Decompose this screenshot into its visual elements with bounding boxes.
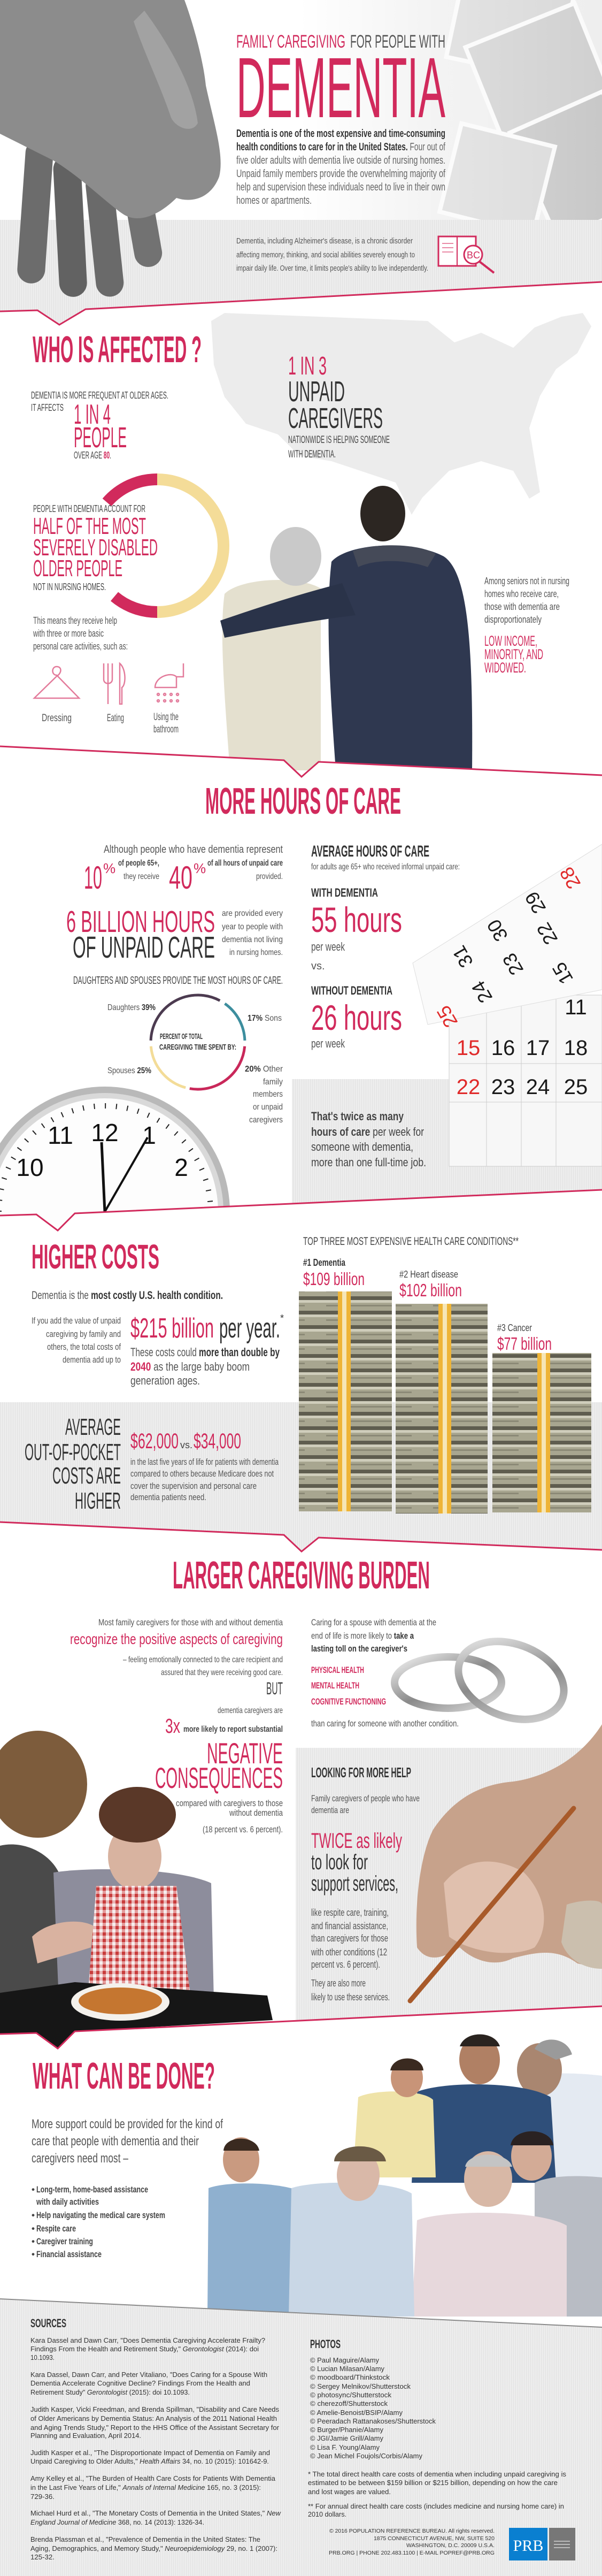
donut chart: caregiving time by relationship xyxy=(107,995,283,1125)
footer: copyright and address: © 2016 POPULATION REFERENCE BUREAU. All rights reserved. xyxy=(329,2528,495,2534)
donut chart: caregiving time by relationship: CAREGIVING TIME SPENT BY: xyxy=(159,1043,236,1052)
stat: 10% of people receive 40% of hours: they receive xyxy=(124,872,159,881)
sources list: Findings From the Health and Retirement Study," Gerontologist (2014): doi xyxy=(30,2345,259,2353)
stat: average out-of-pocket costs xyxy=(25,1414,279,1514)
sources list: Amy Kelley et al., "The Burden of Health Care Costs for Patients With Dementia xyxy=(30,2475,275,2482)
panel: striped box behind twice-as-many text xyxy=(292,1079,602,1218)
photo credits list: © Sergey Melnikov/Shutterstock xyxy=(310,2383,411,2390)
photo credits list: © cherezoff/Shutterstock xyxy=(310,2400,388,2407)
icon: shower (using the bathroom) xyxy=(153,663,183,735)
footer: copyright and address xyxy=(329,2528,495,2556)
text: BUT xyxy=(266,1679,283,1698)
photo: wall clock: 10 xyxy=(16,1153,44,1181)
list: support needed: Respite care xyxy=(36,2223,76,2234)
photo credits list: © JGI/Jamie Grill/Alamy xyxy=(310,2435,384,2442)
icon: book with magnifier xyxy=(438,236,494,273)
text: most costly condition, $215 billion: per year. xyxy=(219,1313,280,1344)
text: looking for more help: to look for xyxy=(311,1851,368,1874)
sources list: SOURCES xyxy=(30,2317,66,2330)
stat: 10% of people receive 40% of hours: % xyxy=(103,860,115,876)
stat: average out-of-pocket costs: OUT-OF-POCKET xyxy=(25,1439,121,1465)
photo: calendar: 22 xyxy=(457,1075,480,1099)
sources list: Michael Hurd et al., "The Monetary Costs of Dementia in the United States," New xyxy=(30,2510,281,2517)
sources list: Judith Kasper, Vicki Freedman, and Brenda Spillman, "Disability and Care Needs xyxy=(30,2406,279,2413)
logo: PRB xyxy=(509,2528,575,2560)
footnotes: and lost wages are valued. xyxy=(308,2488,391,2496)
stat: 6 billion hours of unpaid care xyxy=(66,905,283,987)
photo: feeding an elderly woman xyxy=(0,1731,273,2048)
stat: 10% of people receive 40% of hours: 10 xyxy=(84,860,102,896)
stat: 10% of people receive 40% of hours: Although people who have dementia represent xyxy=(104,844,283,855)
title: FAMILY CAREGIVING xyxy=(236,32,345,52)
list: support needed: • xyxy=(32,2249,35,2259)
text: disproportionately low income xyxy=(484,576,569,676)
text: looking for more help: Family caregivers of people who have xyxy=(311,1793,420,1803)
text: HIGHER COSTS xyxy=(32,1237,159,1276)
text: disproportionately low income: LOW INCOME, xyxy=(484,633,537,649)
photo credits list: © Lucian Milasan/Alamy xyxy=(310,2365,385,2373)
photo: calendar: 18 xyxy=(564,1036,588,1060)
stat: 6 billion hours of unpaid care: year to people with xyxy=(222,922,283,931)
photo: wall clock: 11 xyxy=(48,1121,73,1149)
definition text: impair daily life. Over time, it limits people's ability to live independently. xyxy=(236,264,428,273)
photo: calendar: 15 xyxy=(547,959,577,988)
text: personal care activities: personal care activities, such as: xyxy=(33,641,128,652)
sources list: Kara Dassel, Dawn Carr, and Peter Vitaliano, "Does Caring for a Spouse With xyxy=(30,2371,267,2379)
text: spouse caregiving toll: MENTAL HEALTH xyxy=(311,1680,359,1691)
text: looking for more help: likely to use these services. xyxy=(311,1992,390,2002)
stat: 1 in 4 people over 80 xyxy=(31,390,168,461)
stat: 10% of people receive 40% of hours: 40 xyxy=(169,860,192,896)
stat: average hours of care: vs. xyxy=(311,960,325,972)
photo: calendar: 23 xyxy=(491,1075,515,1099)
stat: average out-of-pocket costs: vs. xyxy=(180,1440,192,1450)
photo credits list: © Jean Michel Foujols/Corbis/Alamy xyxy=(310,2452,423,2460)
donut: half of most severely disabled: PEOPLE WITH DEMENTIA ACCOUNT FOR xyxy=(33,503,145,514)
text: spouse caregiving toll: Caring for a spouse with dementia at the xyxy=(311,1617,436,1627)
photo: calendar: 15 xyxy=(457,1036,480,1060)
chart: top three most expensive conditions (money stacks): $109 billion xyxy=(303,1269,365,1289)
text: positive aspects vs negative consequences: CONSEQUENCES xyxy=(155,1761,283,1794)
list: support needed: Financial assistance xyxy=(36,2249,102,2259)
photo collage: old photographs xyxy=(299,0,602,240)
photo: wall clock: 1 xyxy=(142,1121,156,1149)
stat: 6 billion hours of unpaid care: DAUGHTERS AND SPOUSES PROVIDE THE MOST HOURS OF CARE. xyxy=(73,975,283,987)
stat: 1 in 3 unpaid caregivers: UNPAID xyxy=(288,376,345,408)
stat: average out-of-pocket costs: in the last five years of life for patients with dementia xyxy=(130,1457,279,1467)
text: most costly condition, $215 billion: generation ages. xyxy=(130,1374,200,1387)
text: WHO IS AFFECTED ? xyxy=(33,328,202,370)
stat: average out-of-pocket costs: AVERAGE xyxy=(65,1414,121,1440)
footer: copyright and address: WASHINGTON, D.C. 20009 U.S.A. xyxy=(406,2542,495,2549)
title xyxy=(236,32,445,135)
list: support needed: • xyxy=(32,2236,35,2246)
text: looking for more help: percent vs. 6 percent). xyxy=(311,1959,380,1970)
photo: extended family xyxy=(207,2034,602,2317)
list: support needed: with daily activities xyxy=(36,2197,99,2207)
sources list: 10.1093. xyxy=(30,2354,55,2361)
stat: 6 billion hours of unpaid care: in nursing homes. xyxy=(229,948,283,957)
list: support needed: Help navigating the medical care system xyxy=(36,2210,165,2220)
photo: calendar: 17 xyxy=(526,1036,550,1060)
text: positive aspects vs negative consequences xyxy=(70,1617,283,1834)
chart: top three most expensive conditions (money stacks): #2 Heart disease xyxy=(399,1269,458,1280)
text: positive aspects vs negative consequences: 3x xyxy=(165,1715,180,1738)
sources list: Dementia Accelerate Cognitive Decline? Findings From the Health and xyxy=(30,2380,250,2387)
stat: 10% of people receive 40% of hours: of all hours of unpaid care xyxy=(207,859,283,868)
text: positive aspects vs negative consequences: without dementia xyxy=(229,1808,283,1818)
sources list: Judith Kasper et al., "The Disproportionate Impact of Dementia on Family and xyxy=(30,2449,270,2457)
stat: 1 in 3 unpaid caregivers: NATIONWIDE IS HELPING SOMEONE xyxy=(288,434,390,446)
stat: average out-of-pocket costs: HIGHER xyxy=(75,1488,121,1514)
photo credits list: © moodboard/Thinkstock xyxy=(310,2374,390,2381)
footer: copyright and address: PRB.ORG | PHONE 202.483.1100 | E-MAIL POPREF@PRB.ORG xyxy=(329,2550,495,2556)
text: positive aspects vs negative consequences: compared with caregivers to those xyxy=(176,1798,283,1808)
chart: top three most expensive conditions (money stacks) xyxy=(299,1235,591,1514)
text: WHAT CAN BE DONE? xyxy=(33,2055,215,2097)
photo: wall clock: 2 xyxy=(174,1153,188,1181)
text: most costly condition, $215 billion: $215 billion xyxy=(130,1313,214,1344)
text: spouse caregiving toll: COGNITIVE FUNCTIONING xyxy=(311,1696,386,1707)
photo credits list: © photosync/Shutterstock xyxy=(310,2391,392,2399)
donut chart: caregiving time by relationship: caregivers xyxy=(249,1115,283,1125)
sources list: 125-32. xyxy=(30,2554,55,2561)
photo: calendar: 25 xyxy=(432,1002,462,1031)
sources list: Aging, Demographics, and Memory Study," Neuroepidemiology 29, no. 1 (2007): xyxy=(30,2545,277,2552)
stat: 10% of people receive 40% of hours xyxy=(84,844,283,896)
photo credits list: © Amelie-Benoist/BSIP/Alamy xyxy=(310,2409,403,2417)
donut chart: caregiving time by relationship: members xyxy=(253,1090,283,1099)
stat: 10% of people receive 40% of hours: provided. xyxy=(256,872,283,881)
text: personal care activities xyxy=(33,615,128,652)
photo credits list: © Paul Maguire/Alamy xyxy=(310,2357,380,2364)
text: looking for more help: TWICE as likely xyxy=(311,1829,402,1853)
sources list: Planning and Evaluation, April 2014. xyxy=(30,2432,141,2440)
photo: wall clock xyxy=(0,1087,230,1337)
text: more support could be provided: care that people with dementia and their xyxy=(32,2134,199,2149)
logo: PRB: PRB xyxy=(513,2537,543,2555)
photo: calendar: 22 xyxy=(532,919,562,949)
icon: fork and knife (eating) xyxy=(104,663,125,724)
text: looking for more help: than caregivers for those xyxy=(311,1933,388,1944)
text: positive aspects vs negative consequences: NEGATIVE xyxy=(207,1737,283,1770)
photo: wedding rings xyxy=(395,1627,575,1733)
map: United States xyxy=(211,313,591,515)
text: twice as many hours: more than one full-time job. xyxy=(311,1156,426,1169)
donut chart: caregiving time by relationship: PERCENT OF TOTAL xyxy=(160,1032,203,1041)
stat: 1 in 3 unpaid caregivers: 1 IN 3 xyxy=(288,352,327,380)
stat: average hours of care: for adults age 65+ who received informal unpaid care: xyxy=(311,862,460,872)
footnotes: 2010 dollars. xyxy=(308,2511,346,2518)
title: FOR PEOPLE WITH xyxy=(350,32,445,52)
sources list xyxy=(30,2317,281,2561)
panel: sources and credits background xyxy=(0,2299,602,2576)
donut chart: caregiving time by relationship: Spouses 25% xyxy=(107,1066,151,1075)
text: disproportionately low income: homes who receive care, xyxy=(484,588,559,599)
text: positive aspects vs negative consequences: dementia caregivers are xyxy=(218,1706,283,1715)
text: disproportionately low income: those with dementia are xyxy=(484,601,560,612)
stat: average hours of care: 26 hours xyxy=(311,998,402,1037)
list: support needed: • xyxy=(32,2210,35,2220)
stat: average hours of care: WITHOUT DEMENTIA xyxy=(311,984,392,997)
stat: average out-of-pocket costs: cover the supervision and personal care xyxy=(130,1481,257,1491)
text: spouse caregiving toll: end of life is more likely to take a xyxy=(311,1631,414,1641)
stat: average out-of-pocket costs: $62,000 xyxy=(130,1430,179,1453)
photo credits list: PHOTOS xyxy=(310,2337,341,2351)
text: looking for more help: with other conditions (12 xyxy=(311,1947,387,1958)
donut chart: caregiving time by relationship: 20% Other xyxy=(245,1065,283,1074)
photo credits list: © Peeradach Rattanakoses/Shutterstock xyxy=(310,2418,436,2425)
stat: 1 in 4 people over 80: IT AFFECTS xyxy=(31,402,64,413)
photo: calendar: 31 xyxy=(447,942,477,972)
list: support needed: • xyxy=(32,2184,35,2195)
definition text xyxy=(236,236,428,273)
intro paragraph: health conditions to care for in the United States. Four out of xyxy=(236,141,445,153)
photo credits list: © Burger/Phanie/Alamy xyxy=(310,2426,384,2434)
text: positive aspects vs negative consequences: Most family caregivers for those with and without dementia xyxy=(98,1617,283,1627)
icon: shower (using the bathroom): Using the xyxy=(153,712,179,723)
stat: average hours of care: AVERAGE HOURS OF CARE xyxy=(311,843,429,860)
stat: 10% of people receive 40% of hours: % xyxy=(194,860,206,876)
intro paragraph: five older adults with dementia live outside of nursing homes. xyxy=(236,155,445,166)
footnotes: estimated to be between $159 billion or $215 billion, depending on how the care xyxy=(308,2479,558,2487)
text: looking for more help: LOOKING FOR MORE HELP xyxy=(311,1764,411,1780)
text: twice as many hours: That's twice as many xyxy=(311,1110,404,1123)
text: spouse caregiving toll: lasting toll on the caregiver's xyxy=(311,1644,407,1654)
text: most costly condition, $215 billion: If you add the value of unpaid xyxy=(32,1316,121,1326)
sources list: England Journal of Medicine 368, no. 14 (2013): 1326-34. xyxy=(30,2519,204,2526)
stat: 1 in 3 unpaid caregivers: WITH DEMENTIA. xyxy=(288,449,336,460)
text: looking for more help: support services, xyxy=(311,1872,398,1895)
intro paragraph: Unpaid family members provide the overwhelming majority of xyxy=(236,168,445,180)
stat: average out-of-pocket costs: compared to others because Medicare does not xyxy=(130,1469,274,1479)
sources list: Unpaid Caregiving to Older Adults," Health Affairs 34, no. 10 (2015): 101642-9. xyxy=(30,2458,269,2465)
stat: 1 in 4 people over 80: 1 IN 4 xyxy=(74,399,111,430)
list: support needed: • xyxy=(32,2223,35,2234)
text: most costly condition, $215 billion xyxy=(32,1289,284,1387)
stat: 6 billion hours of unpaid care: are provided every xyxy=(222,909,283,918)
text: most costly condition, $215 billion: caregiving by family and xyxy=(46,1329,121,1339)
text: disproportionately low income: WIDOWED. xyxy=(484,660,526,676)
text: spouse caregiving toll: than caring for someone with another condition. xyxy=(311,1718,459,1729)
photo: calendar: 24 xyxy=(467,977,497,1007)
text: twice as many hours: someone with dementia, xyxy=(311,1140,413,1153)
sources list: in the Last Five Years of Life," Annals of Internal Medicine 165, no. 3 (2015): xyxy=(30,2484,261,2491)
text: positive aspects vs negative consequences: recognize the positive aspects of caregiving xyxy=(70,1631,283,1647)
text: personal care activities: This means they receive help xyxy=(33,615,117,626)
sources list: of Older Americans by Dementia Status: An Analysis of the 2011 National Health xyxy=(30,2415,277,2422)
photo credits list: © Lisa F. Young/Alamy xyxy=(310,2444,380,2451)
text: looking for more help: dementia are xyxy=(311,1805,349,1815)
text: more support could be provided: caregivers need most – xyxy=(32,2151,128,2166)
stat: average hours of care: WITH DEMENTIA xyxy=(311,886,378,899)
stat: 1 in 4 people over 80: OVER AGE 80. xyxy=(74,450,111,461)
stat: average out-of-pocket costs: $34,000 xyxy=(194,1430,241,1453)
icon: hanger (dressing) xyxy=(34,667,79,724)
sources list: Kara Dassel and Dawn Carr, "Does Dementia Caregiving Accelerate Frailty? xyxy=(30,2337,265,2344)
stat: average out-of-pocket costs: COSTS ARE xyxy=(52,1463,121,1489)
donut chart: caregiving time by relationship: 17% Sons xyxy=(248,1014,282,1023)
text: most costly condition, $215 billion: others, the total costs of xyxy=(47,1342,121,1352)
text: looking for more help: They are also more xyxy=(311,1978,366,1989)
sources list: Brenda Plassman et al., "Prevalence of Dementia in the United States: The xyxy=(30,2536,260,2543)
panel: help-seeking striped box xyxy=(296,1748,602,2021)
stat: 6 billion hours of unpaid care: OF UNPAID CARE xyxy=(73,930,215,965)
intro paragraph: Dementia is one of the most expensive and time-consuming xyxy=(236,128,445,140)
sources list: and Aging Trends Study," Report to the HHS Office of the Assistant Secretary for xyxy=(30,2424,279,2432)
photo: calendar: 24 xyxy=(526,1075,550,1099)
icon: book with magnifier: BC xyxy=(467,250,480,261)
text: looking for more help: and financial assistance, xyxy=(311,1921,388,1931)
text: looking for more help xyxy=(311,1764,420,2002)
stat: 1 in 3 unpaid caregivers xyxy=(288,352,390,460)
photo: caregiver couple from behind xyxy=(220,486,472,770)
text: positive aspects vs negative consequences: – feeling emotionally connected to the care recipient and xyxy=(123,1655,283,1664)
stat: average hours of care: per week xyxy=(311,1037,345,1050)
photo: calendar: 28 xyxy=(555,863,585,893)
intro paragraph: help and supervision these individuals need to live in their own xyxy=(236,181,445,193)
intro paragraph xyxy=(236,128,445,207)
icon: fork and knife (eating): Eating xyxy=(107,713,124,724)
stat: 1 in 3 unpaid caregivers: CAREGIVERS xyxy=(288,402,383,434)
photo: calendar: 23 xyxy=(498,950,528,979)
icon: hanger (dressing): Dressing xyxy=(42,713,72,724)
footer: copyright and address: 1875 CONNECTICUT AVENUE, NW, SUITE 520 xyxy=(374,2535,495,2542)
stat: average hours of care xyxy=(311,843,460,1050)
text: positive aspects vs negative consequences: assured that they were receiving good care. xyxy=(161,1668,283,1677)
definition text: affecting memory, thinking, and social abilities severely enough to xyxy=(236,250,415,259)
text: twice as many hours: hours of care per week for xyxy=(311,1125,424,1138)
text: more support could be provided: More support could be provided for the kind of xyxy=(32,2117,223,2131)
text: spouse caregiving toll: PHYSICAL HEALTH xyxy=(311,1665,364,1675)
text: positive aspects vs negative consequences: more likely to report substantial xyxy=(183,1725,283,1734)
stat: 6 billion hours of unpaid care: dementia not living xyxy=(222,935,283,944)
donut: half of most severely disabled: SEVERELY DISABLED xyxy=(33,534,158,561)
donut chart: caregiving time by relationship: or unpaid xyxy=(253,1103,283,1112)
sources list: 729-36. xyxy=(30,2493,55,2501)
stat: 1 in 4 people over 80: DEMENTIA IS MORE FREQUENT AT OLDER AGES. xyxy=(31,390,168,401)
text: spouse caregiving toll xyxy=(311,1617,459,1729)
text: positive aspects vs negative consequences: (18 percent vs. 6 percent). xyxy=(203,1824,283,1834)
donut: half of most severely disabled: NOT IN NURSING HOMES. xyxy=(33,582,106,592)
text: twice as many hours xyxy=(311,1110,426,1169)
stat: average hours of care: 55 hours xyxy=(311,900,402,939)
photo: calendar: 29 xyxy=(520,888,550,918)
text: looking for more help: like respite care, training, xyxy=(311,1907,389,1918)
footnotes xyxy=(308,2471,566,2518)
intro paragraph: homes or apartments. xyxy=(236,195,312,207)
footnotes: ** For annual direct health care costs (includes medicine and nursing home care) in xyxy=(308,2503,564,2510)
stat: 10% of people receive 40% of hours: of people 65+, xyxy=(118,859,159,868)
footnotes: * The total direct health care costs of dementia when including unpaid caregiving is xyxy=(308,2471,566,2478)
panel: out-of-pocket band xyxy=(0,1402,602,1551)
photo: holding hands xyxy=(0,0,221,298)
stat: average hours of care: per week xyxy=(311,940,345,953)
text: more support could be provided xyxy=(32,2117,223,2166)
text: most costly condition, $215 billion: These costs could more than double by xyxy=(130,1346,280,1359)
chart: top three most expensive conditions (money stacks): #3 Cancer xyxy=(497,1323,532,1333)
text: disproportionately low income: MINORITY, AND xyxy=(484,646,543,662)
text: most costly condition, $215 billion: Dementia is the most costly U.S. health condition. xyxy=(32,1289,223,1302)
photo: hands with pencil xyxy=(410,1724,602,2001)
stat: average out-of-pocket costs: dementia patients need. xyxy=(130,1492,206,1502)
photo: calendar: 30 xyxy=(482,916,512,945)
donut: half of most severely disabled: HALF OF THE MOST xyxy=(33,513,146,539)
stat: 1 in 4 people over 80: PEOPLE xyxy=(74,422,127,454)
donut: half of most severely disabled xyxy=(33,479,223,612)
text: most costly condition, $215 billion: dementia add up to xyxy=(63,1355,121,1365)
list: support needed xyxy=(32,2184,165,2259)
donut chart: caregiving time by relationship: Daughters 39% xyxy=(107,1003,156,1012)
icon: shower (using the bathroom): bathroom xyxy=(153,724,179,735)
chart: top three most expensive conditions (money stacks): $77 billion xyxy=(497,1334,552,1354)
photo credits list xyxy=(310,2337,436,2460)
photo: calendar xyxy=(413,844,602,1166)
photo: calendar: 16 xyxy=(491,1036,515,1060)
stat: 6 billion hours of unpaid care: 6 BILLION HOURS xyxy=(66,905,215,939)
intro band: definition xyxy=(0,220,602,325)
chart: top three most expensive conditions (money stacks): $102 billion xyxy=(399,1280,462,1300)
list: support needed: Caregiver training xyxy=(36,2236,93,2246)
sources list: Retirement Study" Gerontologist (2015): doi 10.1093. xyxy=(30,2389,190,2396)
text: most costly condition, $215 billion: 2040 as the large baby boom xyxy=(130,1360,250,1373)
text: disproportionately low income: disproportionately xyxy=(484,614,542,625)
text: personal care activities: with three or more basic xyxy=(33,628,104,639)
photo: calendar: 25 xyxy=(564,1075,588,1099)
chart: top three most expensive conditions (money stacks): #1 Dementia xyxy=(303,1257,346,1268)
list: support needed: Long-term, home-based assistance xyxy=(36,2184,148,2195)
photo: calendar: 11 xyxy=(565,996,587,1019)
photo: wall clock: 12 xyxy=(91,1119,119,1146)
donut chart: caregiving time by relationship: family xyxy=(263,1077,283,1087)
definition text: Dementia, including Alzheimer's disease, is a chronic disorder xyxy=(236,236,413,246)
donut: half of most severely disabled: OLDER PEOPLE xyxy=(33,555,122,582)
text: most costly condition, $215 billion: * xyxy=(280,1313,284,1324)
